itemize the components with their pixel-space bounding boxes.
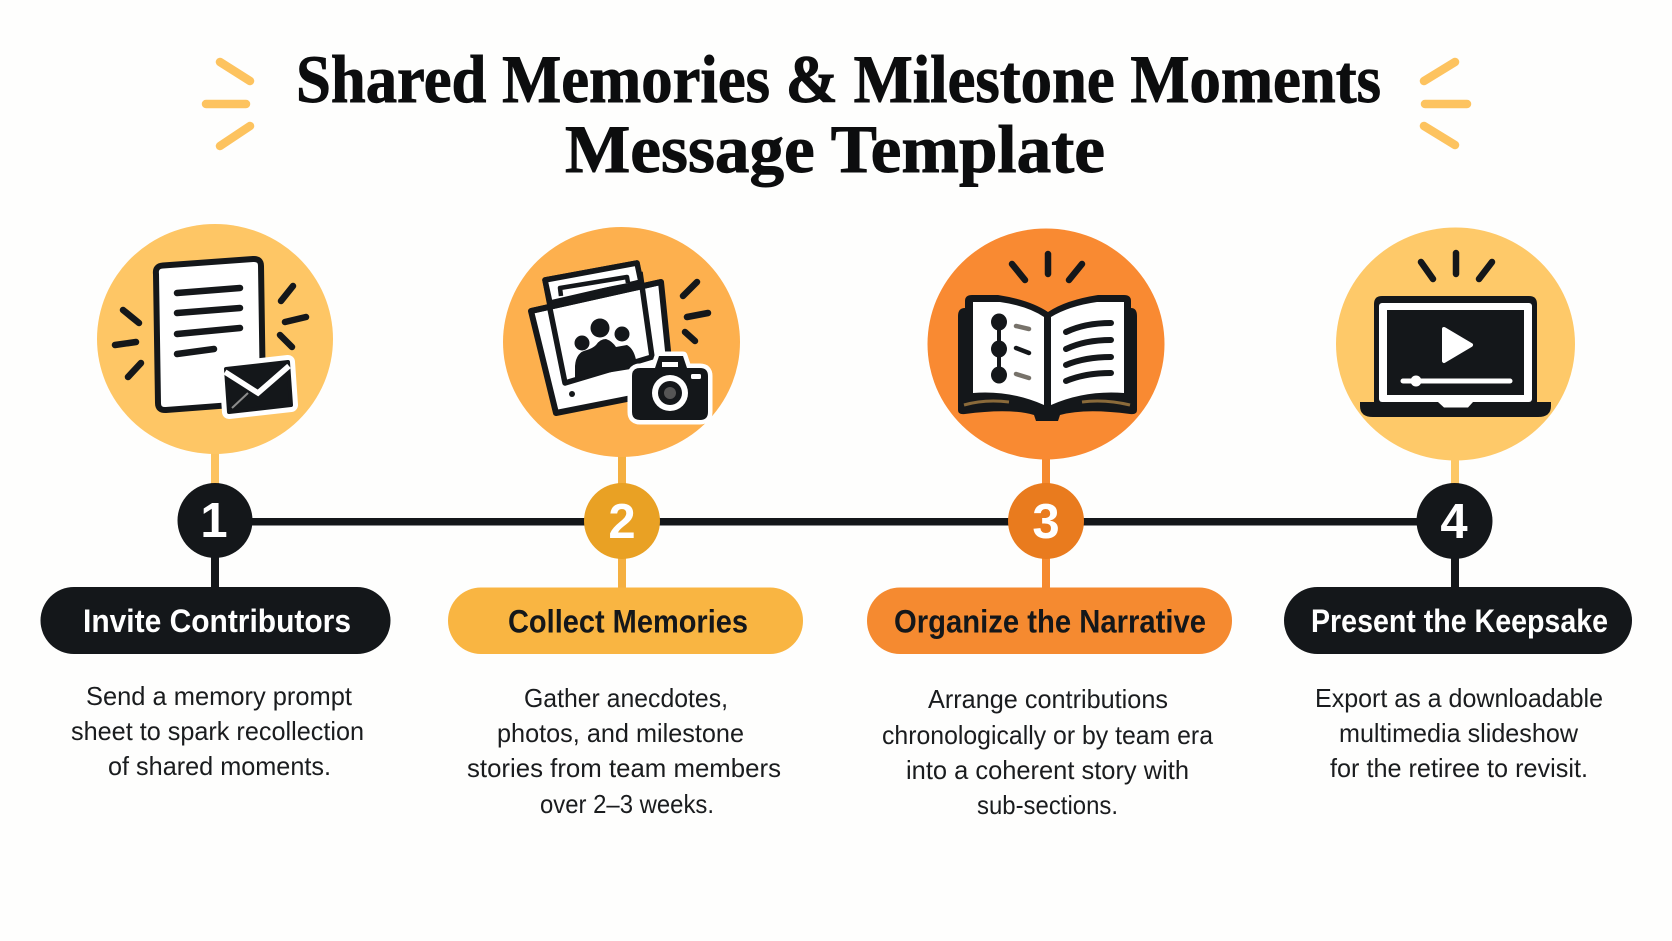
icon: left title sparks: [206, 62, 250, 146]
step 1 description: of shared moments.: [108, 751, 331, 781]
step 4 label pill: [1284, 587, 1632, 654]
step 1 description: [71, 681, 364, 781]
icon: open book with timeline: [958, 254, 1137, 421]
panel: step 3 organize the narrative: [867, 228, 1232, 820]
panel: step 4 present the keepsake: [1284, 228, 1632, 783]
step 4 description: Export as a downloadable: [1315, 683, 1603, 713]
step 3 description: chronologically or by team era: [882, 720, 1214, 750]
icon circle: step 2: [503, 227, 740, 457]
step 1 label pill: Invite Contributors: [83, 603, 351, 639]
step 1 label pill: [40, 587, 390, 654]
step 4 label pill: Present the Keepsake: [1311, 603, 1608, 639]
number badge 2: 2: [608, 495, 636, 549]
stem: step 4 lower: [1451, 550, 1459, 590]
step 3 description: sub-sections.: [977, 790, 1118, 820]
number badge 4: [1416, 483, 1492, 559]
icon circle: step 1: [97, 224, 333, 454]
number badge 2: [584, 483, 660, 559]
step 3 description: [882, 684, 1214, 820]
step 2 description: photos, and milestone: [497, 718, 744, 748]
step 2 label pill: Collect Memories: [508, 604, 748, 640]
title: Message Template: [565, 111, 1105, 187]
stem: step 1: [211, 450, 219, 590]
step 2 description: over 2–3 weeks.: [540, 789, 714, 819]
stem: step 4: [1451, 450, 1459, 520]
stem: step 2: [618, 450, 626, 590]
step 3 label pill: Organize the Narrative: [894, 604, 1206, 640]
stem: step 1 lower: [211, 550, 219, 590]
step 1 description: sheet to spark recollection: [71, 716, 364, 746]
icon: right title sparks: [1424, 62, 1467, 145]
icon circle: step 3: [928, 228, 1164, 460]
number badge 4: 4: [1440, 495, 1468, 549]
icon circle: step 4: [1336, 228, 1575, 460]
icon: photos with camera: [531, 263, 708, 420]
title: Shared Memories & Milestone Moments: [296, 41, 1381, 117]
title: [296, 41, 1381, 187]
timeline connector line: [215, 518, 1455, 526]
panel: step 2 collect memories: [448, 227, 803, 819]
step 2 description: stories from team members: [467, 753, 781, 783]
panel: step 1 invite contributors: [40, 224, 390, 781]
step 2 description: [467, 683, 781, 819]
number badge 3: 3: [1032, 495, 1060, 549]
step 3 description: Arrange contributions: [928, 684, 1168, 714]
step 3 label pill: [867, 588, 1232, 654]
step 2 label pill: [448, 588, 803, 654]
number badge 3: [1008, 483, 1084, 559]
step 1 description: Send a memory prompt: [86, 681, 353, 711]
step 4 description: [1315, 683, 1603, 783]
stem: step 3: [1042, 450, 1050, 590]
number badge 1: 1: [200, 494, 228, 548]
icon: document with envelope: [115, 259, 306, 412]
step 2 description: Gather anecdotes,: [524, 683, 728, 713]
step 4 description: multimedia slideshow: [1339, 718, 1578, 748]
step 3 description: into a coherent story with: [906, 755, 1189, 785]
step 4 description: for the retiree to revisit.: [1330, 753, 1588, 783]
number badge 1: [178, 483, 252, 558]
icon: laptop with video player: [1360, 253, 1551, 417]
